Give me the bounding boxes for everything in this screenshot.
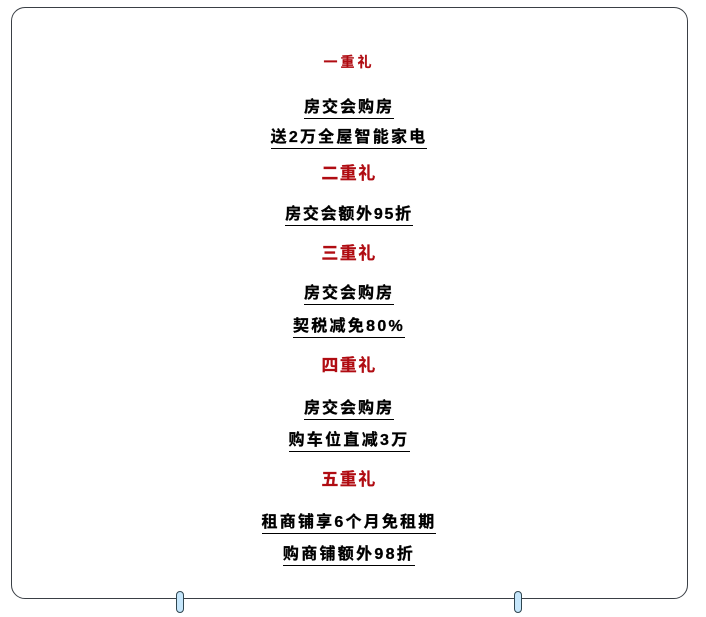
text: first gift line 2: 送2万全屋智能家电 [271, 129, 427, 146]
handle: left [176, 591, 184, 613]
text: fifth gift line 2: 购商铺额外98折 [283, 546, 415, 563]
heading: first gift: 一重礼 [324, 54, 374, 70]
heading: second gift: 二重礼 [321, 164, 377, 183]
heading: third gift: 三重礼 [321, 244, 377, 263]
text: second gift line: 房交会额外95折 [285, 206, 413, 223]
text: fourth gift line 2: 购车位直减3万 [288, 432, 410, 449]
text: fifth gift line 1: 租商铺享6个月免租期 [262, 514, 436, 531]
heading: fifth gift: 五重礼 [321, 470, 377, 489]
heading: fourth gift: 四重礼 [321, 356, 377, 375]
text: fourth gift line 1: 房交会购房 [304, 400, 394, 417]
text: third gift line 1: 房交会购房 [304, 285, 394, 302]
text: third gift line 2: 契税减免80% [293, 318, 405, 335]
handle: right [514, 591, 522, 613]
text: first gift line 1: 房交会购房 [304, 99, 394, 116]
